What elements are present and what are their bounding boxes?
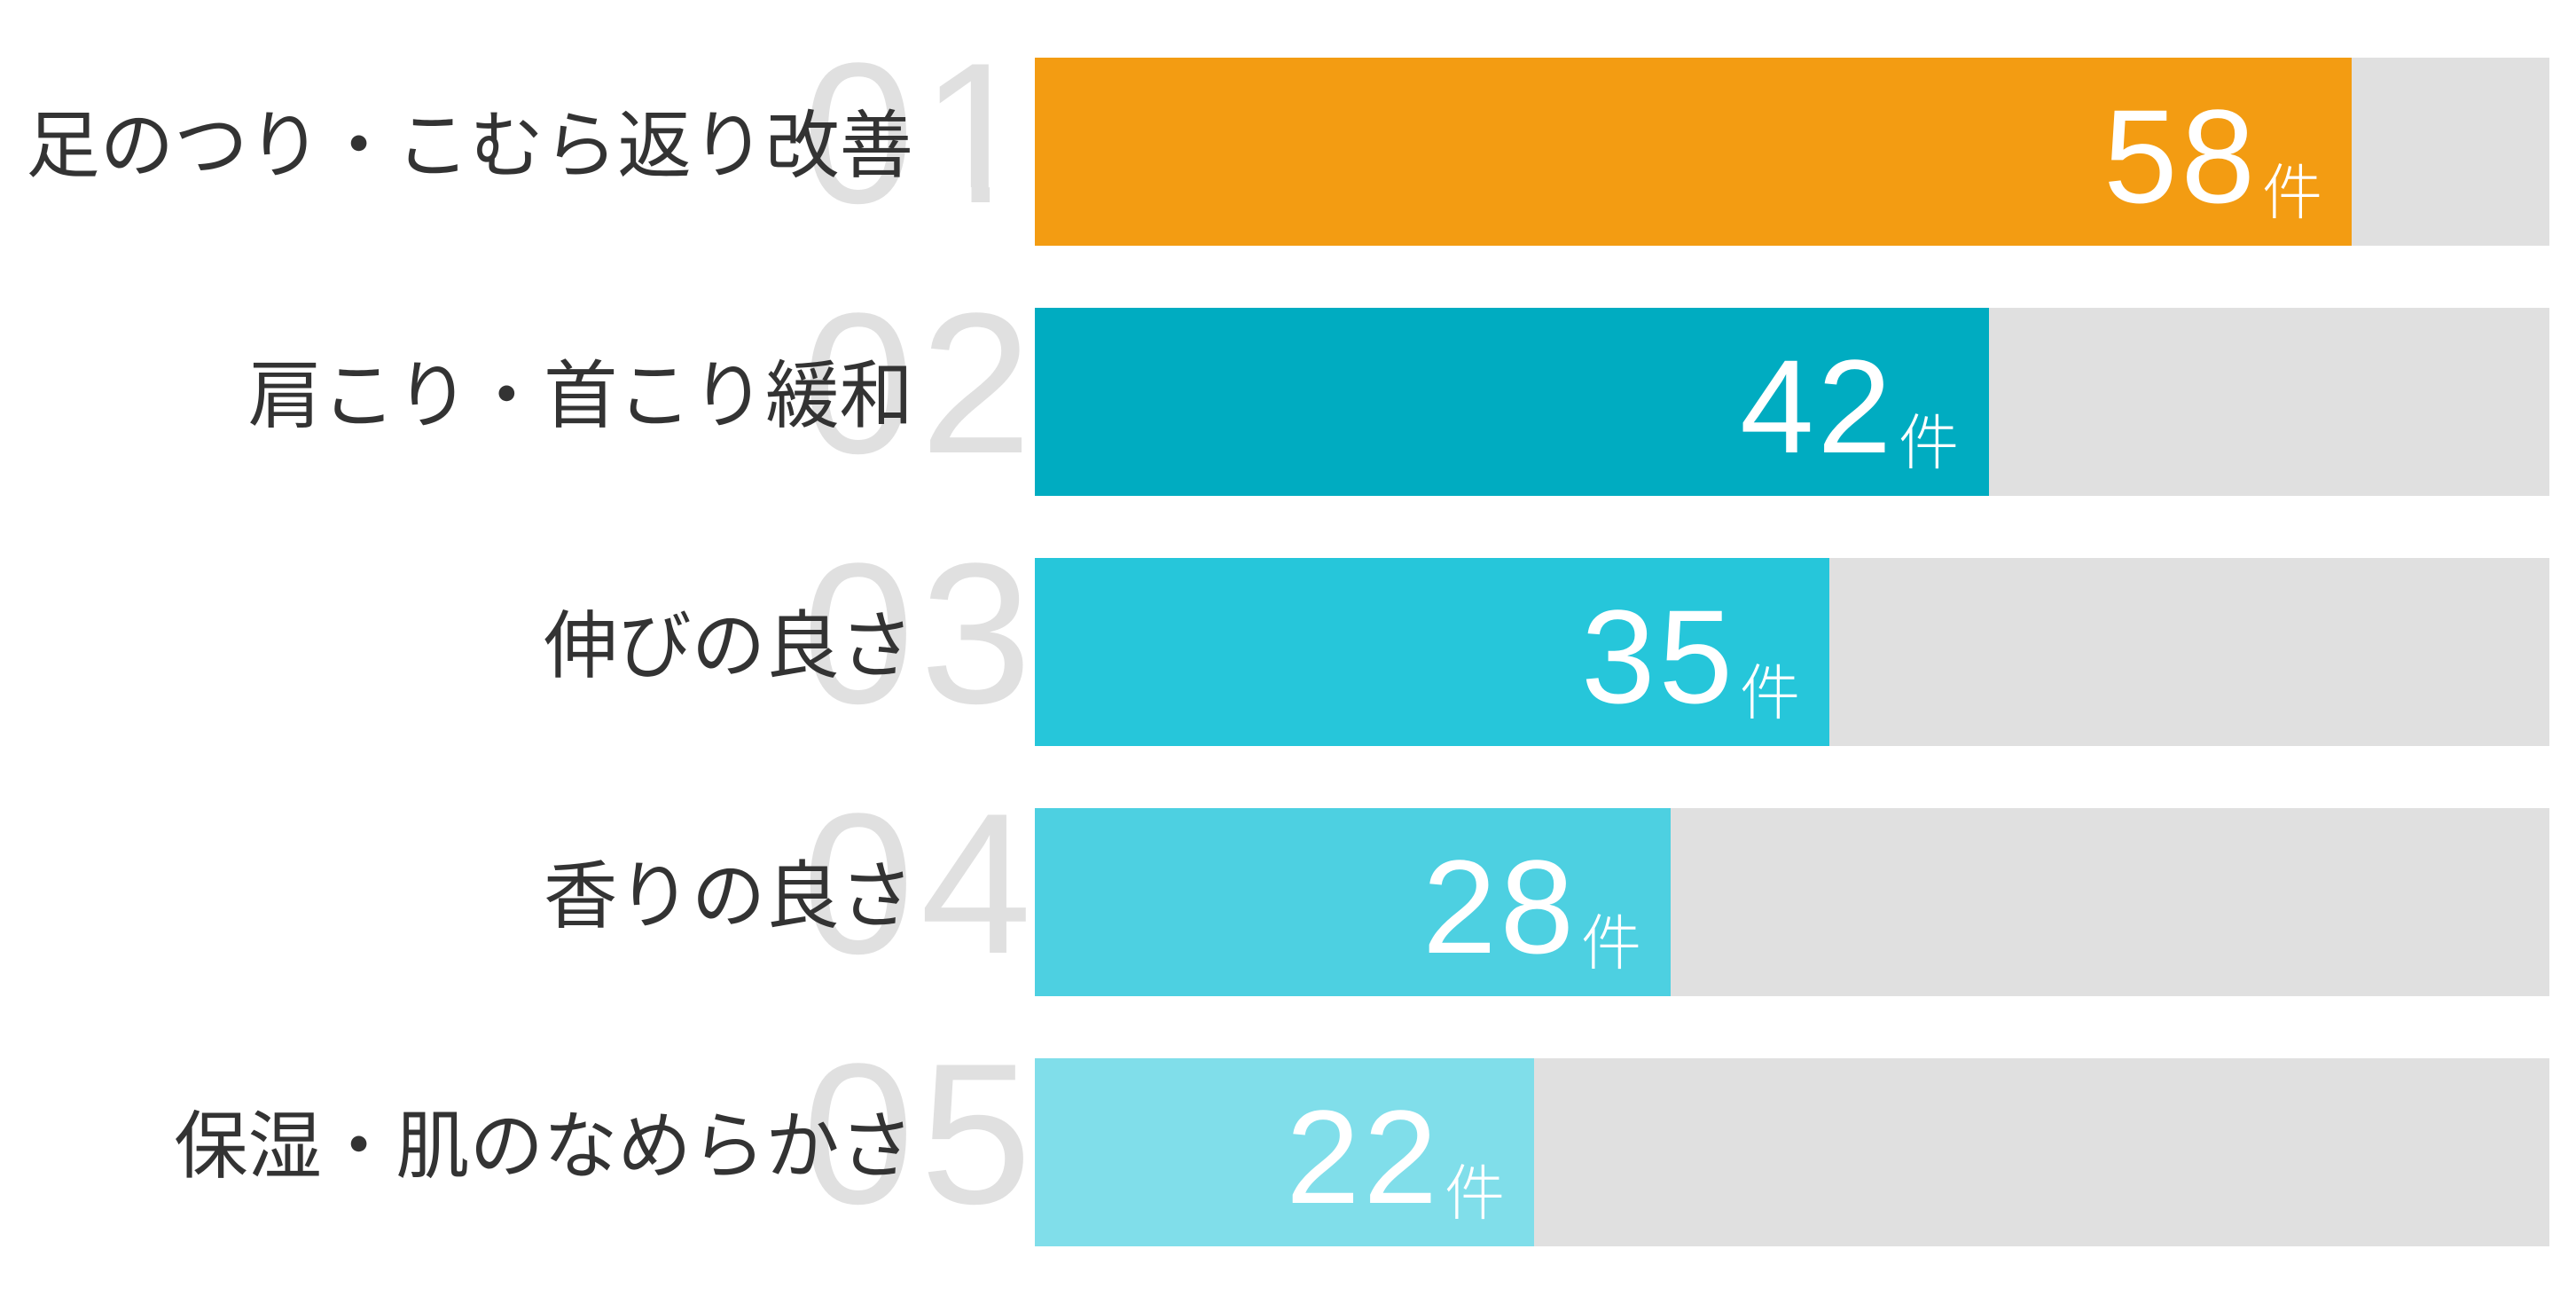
value bar [1035, 558, 1829, 746]
value bar [1035, 1058, 1534, 1246]
rank number 04: 04 [803, 771, 1037, 995]
unit: 件 [1740, 660, 1800, 727]
value: 22 [1286, 1082, 1441, 1231]
track [1035, 1058, 2549, 1246]
value: 42 [1740, 332, 1895, 481]
rank number 01: 0 [803, 20, 920, 245]
value: 35 [1581, 582, 1736, 731]
track [1035, 808, 2549, 996]
row 4: fragrance [544, 771, 2549, 996]
label: 肩こり・首こり緩和 [247, 355, 913, 437]
rank number 03: 03 [803, 521, 1037, 745]
label: 保湿・肌のなめらかさ [174, 1105, 913, 1188]
value bar [1035, 58, 2352, 246]
unit: 件 [1899, 410, 1959, 477]
rank number 02: 02 [803, 271, 1037, 495]
rank number 01: 1 [920, 20, 1038, 245]
track [1035, 308, 2549, 496]
unit: 件 [1445, 1160, 1505, 1228]
track [1035, 558, 2549, 746]
unit: 件 [1581, 910, 1641, 978]
row 5: moisture and skin smoothness [174, 1021, 2549, 1246]
row 1: leg cramps [29, 58, 2549, 246]
value bar [1035, 308, 1989, 496]
value: 28 [1422, 832, 1578, 981]
value: 58 [2103, 82, 2259, 231]
value bar [1035, 808, 1671, 996]
label: 足のつり・こむら返り改善 [26, 105, 913, 187]
rank number 05: 05 [803, 1021, 1037, 1245]
unit: 件 [2262, 160, 2322, 227]
row 3: spreadability [544, 521, 2549, 746]
label: 香りの良さ [544, 855, 913, 938]
row 2: shoulder and neck [247, 271, 2549, 496]
label: 伸びの良さ [544, 605, 913, 687]
track [1035, 58, 2549, 246]
